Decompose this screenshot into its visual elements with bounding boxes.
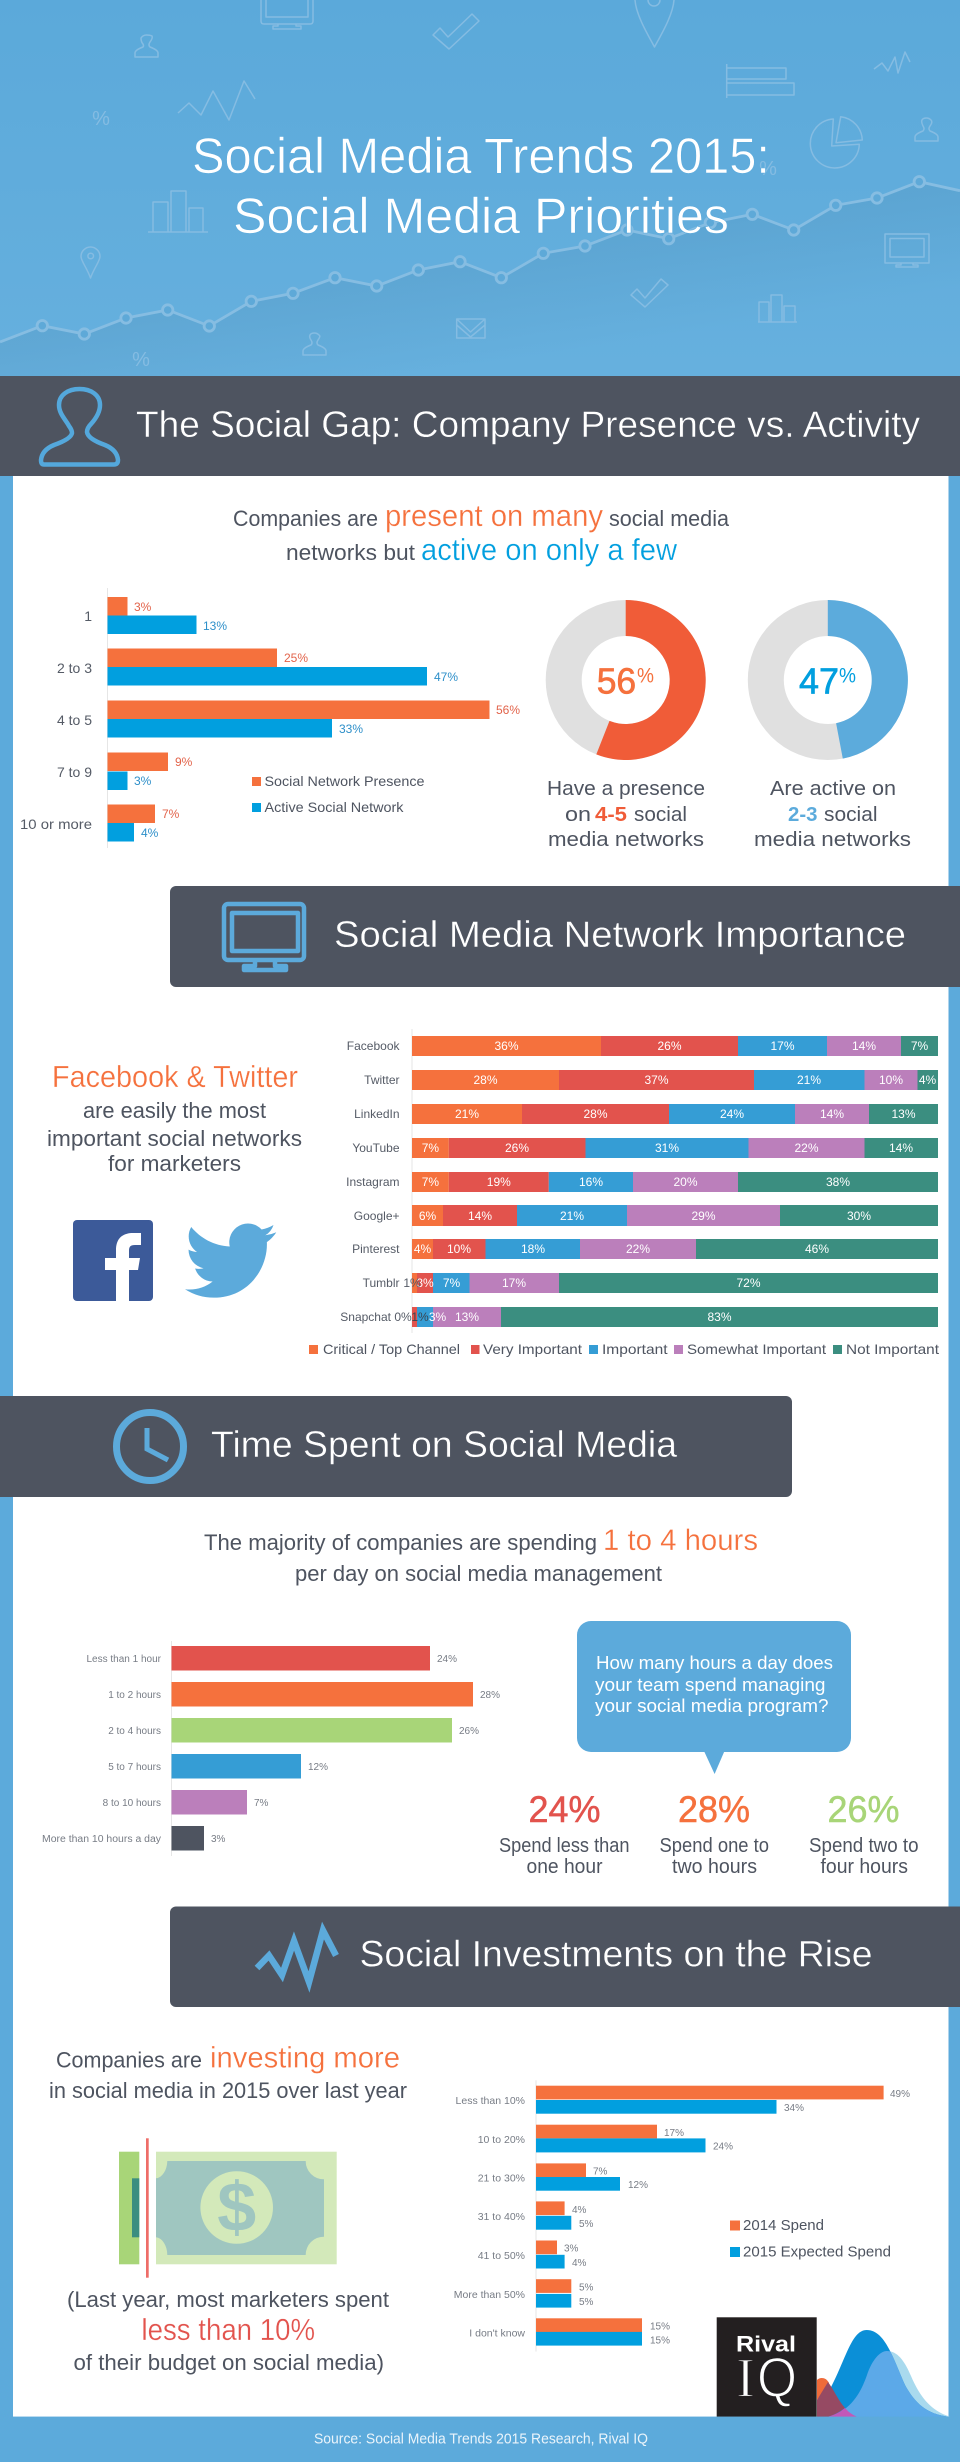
bar chart: network presence vs active: 3% [134,600,152,614]
donut chart: 56% presence: 56 [597,660,636,701]
logo: Rival IQ: I [736,2348,755,2410]
intro statement: investing more: in social media in 2015 over last year [49,2078,407,2103]
segment values: 18% [521,1242,545,1256]
segment values: 21% [455,1107,479,1121]
bar chart: network presence vs active [20,588,520,848]
text block: last year spend [67,2287,389,2375]
icon: dollar bill split at 10 percent [119,2138,337,2278]
stacked bar chart: network importance: Facebook [347,1039,400,1053]
segment values: 7% [911,1039,929,1053]
segment values: 6% [419,1209,437,1223]
bar chart: 2014 vs 2015 spend [454,2080,910,2352]
bar chart: hours spent: 2 to 4 hours [108,1726,161,1737]
segment values: 24% [720,1107,744,1121]
segment values: 14% [889,1141,913,1155]
callout: survey question [577,1621,851,1774]
callout: survey question: your social media program? [595,1695,828,1716]
stat: 24 percent: 24% [528,1789,600,1830]
segment values: 17% [770,1039,795,1053]
donut chart: 56% presence: % [637,665,654,688]
bar chart: 2014 vs 2015 spend: 31 to 40% [478,2211,525,2223]
bar chart: 2014 vs 2015 spend: 17% [664,2128,684,2139]
segment values: 22% [794,1141,819,1155]
section header: Social Investments [170,1906,960,2007]
bar chart: hours spent: More than 10 hours a day [42,1834,161,1845]
bar chart: hours spent: 5 to 7 hours [108,1762,161,1773]
stacked bar chart: network importance: Twitter [364,1073,400,1087]
segment values: 72% [736,1276,761,1290]
bar chart: 2014 vs 2015 spend: 24% [713,2142,733,2152]
stat: 28 percent [660,1789,769,1878]
bar chart: network presence vs active: 7% [162,807,180,821]
legend: Social Network Presence [264,773,425,789]
text block: last year spend: (Last year, most marketers spent [67,2287,389,2312]
donut chart: 47% active: 47 [799,660,839,701]
text block: Facebook and Twitter [47,1059,302,1176]
bar chart: 2014 vs 2015 spend: 15% [650,2336,670,2346]
background line chart [0,176,960,376]
segment values: 31% [655,1141,679,1155]
legend: Somewhat Important [687,1341,826,1357]
text block: Facebook and Twitter: for marketers [108,1151,241,1176]
section header: Network Importance [170,886,960,987]
icon: clock [116,1412,184,1480]
header banner [0,0,960,376]
bar chart: network presence vs active: 3% [134,774,152,788]
bar chart: network presence vs active: 1 [84,608,92,624]
stat: 28 percent: two hours [672,1856,757,1878]
bar chart: hours spent: 8 to 10 hours [103,1798,161,1809]
stat: 26 percent [809,1789,918,1878]
bar chart: hours spent [42,1641,500,1856]
donut caption: active: Are active on [770,778,896,800]
segment values: 83% [707,1310,732,1324]
legend: Important [602,1341,668,1357]
segment values: 3% [429,1310,447,1324]
intro statement: presence vs activity: social media [609,506,730,531]
bar chart: 2014 vs 2015 spend: 21 to 30% [478,2172,525,2184]
segment values: 7% [422,1141,439,1155]
segment values: 28% [473,1073,498,1087]
bar chart: 2014 vs 2015 spend: 4% [572,2258,587,2269]
bar chart: 2014 vs 2015 spend: 5% [579,2297,594,2308]
bar chart: network presence vs active: 13% [203,619,227,633]
intro statement: presence vs activity [233,498,730,567]
segment values: 20% [673,1175,698,1189]
stacked bar chart: network importance: Pinterest [352,1242,400,1256]
text block: last year spend: of their budget on social media) [74,2350,384,2375]
segment values: 1% [403,1276,421,1290]
stat: 26 percent: 26% [828,1789,900,1830]
legend: 2015 Expected Spend [743,2244,891,2260]
text block: Facebook and Twitter: important social networks [47,1126,302,1151]
background percent signs: % [759,158,777,180]
donut caption: presence: Have a presence [547,778,705,800]
legend: Active Social Network [264,799,405,815]
section header: Time Spent [0,1396,792,1497]
segment values: 26% [505,1141,529,1155]
legend [252,773,425,815]
segment values: 4% [414,1242,432,1256]
legend: Critical / Top Channel [323,1341,460,1357]
bar chart: hours spent: 12% [308,1762,328,1773]
intro statement: presence vs activity: active on only a few [421,532,678,567]
stacked bar chart: network importance: YouTube [352,1141,400,1155]
bar chart: 2014 vs 2015 spend: Less than 10% [456,2095,525,2107]
segment values: 29% [691,1209,716,1223]
segment values: 21% [560,1209,584,1223]
title: Social Media Priorities [233,188,729,244]
intro statement: hours per day: per day on social media management [295,1561,662,1586]
segment values: 19% [487,1175,511,1189]
legend: 2014 Spend [743,2217,824,2234]
title [192,128,770,244]
bar chart: hours spent: 3% [211,1834,226,1845]
bar chart: 2014 vs 2015 spend: 15% [650,2322,670,2332]
heading: Social Investments on the Rise [360,1934,872,1975]
bar chart: hours spent: 26% [459,1726,479,1737]
section header: The Social Gap [0,376,960,476]
bar chart: network presence vs active: 10 or more [20,816,92,832]
donut caption: active [754,778,911,851]
donut caption: active: 2-3 [788,804,818,826]
bar chart: hours spent: 1 to 2 hours [108,1690,161,1701]
segment values: 28% [583,1107,608,1121]
bar chart: 2014 vs 2015 spend: 34% [784,2103,804,2114]
segment values: 36% [494,1039,519,1053]
background percent signs: % [92,108,110,130]
stat: 28 percent: 28% [678,1789,750,1830]
segment values: 17% [502,1276,526,1290]
stacked bar chart: network importance: Google+ [354,1209,400,1223]
bar chart: hours spent: 7% [254,1798,269,1809]
donut chart: 47% active [766,600,908,759]
icon: zigzag trend line [257,1930,336,1982]
bar chart: hours spent: Less than 1 hour [86,1654,162,1665]
icon: Facebook [73,1220,153,1301]
segments: somewhat important [433,1036,918,1327]
stat: 24 percent: Spend less than [499,1835,630,1857]
segment values: 14% [468,1209,492,1223]
bar chart: hours spent: 24% [437,1654,457,1665]
background percent signs [92,108,777,371]
bar chart: 2014 vs 2015 spend: 10 to 20% [478,2134,525,2146]
stat: 26 percent: Spend two to [809,1835,918,1857]
bar chart: network presence vs active: 7 to 9 [57,764,92,780]
logo: Rival IQ: Q [757,2346,797,2409]
intro statement: presence vs activity: networks but [286,540,415,565]
segment values [394,1039,937,1324]
footer: source: Source: Social Media Trends 2015 Research, Rival IQ [314,2431,648,2448]
segment values: 3% [416,1276,434,1290]
segment values: 22% [626,1242,650,1256]
text block: Facebook and Twitter: are easily the most [83,1098,266,1123]
segments: critical / top channel [412,1036,601,1293]
bar chart: 2014 vs 2015 spend: 49% [890,2089,910,2100]
segments: important [417,1036,864,1327]
bar chart: 2014 vs 2015 spend: I don't know [469,2328,525,2340]
heading: Social Media Network Importance [334,914,906,955]
legend [309,1341,939,1357]
text block: last year spend: less than 10% [142,2312,315,2347]
bar chart: network presence vs active: 33% [339,722,363,736]
segments: not important [501,1036,938,1327]
bar chart: network presence vs active: 25% [284,651,308,665]
intro statement: investing more: investing more [210,2042,400,2075]
legend: Very Important [483,1341,582,1357]
heading: The Social Gap: Company Presence vs. Activity [136,404,920,445]
segment values: 10% [447,1242,471,1256]
icon: Twitter [185,1224,276,1298]
segment values: 21% [797,1073,821,1087]
intro statement: hours per day: 1 to 4 hours [603,1524,758,1557]
segment values: 37% [644,1073,669,1087]
icon: dollar bill split at 10 percent: $ [217,2168,256,2246]
bar chart: 2014 vs 2015 spend: 7% [593,2166,608,2178]
segment values: 38% [826,1175,850,1189]
legend: Not Important [846,1341,939,1357]
title: Social Media Trends 2015: [192,128,770,184]
segment values: 30% [847,1209,871,1223]
segment values: 7% [443,1276,461,1290]
intro statement: investing more: Companies are [56,2048,202,2073]
icon: person [41,389,118,464]
stat: 26 percent: four hours [820,1856,908,1878]
segment values: 14% [820,1107,844,1121]
background icons [81,0,938,355]
bar chart: 2014 vs 2015 spend: More than 50% [454,2289,525,2301]
segment values: 0% [394,1310,412,1324]
intro statement: presence vs activity: present on many [385,498,603,533]
footer: source [0,2417,960,2462]
segment values: 16% [579,1175,603,1189]
stat: 24 percent: one hour [526,1856,603,1878]
donut caption: presence: media networks [548,829,704,851]
icon: monitor [224,904,304,970]
segment values: 4% [919,1073,937,1087]
stat: 24 percent [499,1789,630,1878]
segment values: 7% [422,1175,439,1189]
bar chart: network presence vs active: 4 to 5 [57,712,92,728]
donut caption: active: social [824,804,878,826]
bar chart: network presence vs active: 4% [141,826,159,840]
logo: Rival IQ [717,2317,950,2417]
stacked bar chart: network importance [309,1029,939,1357]
segment values: 13% [455,1310,479,1324]
bar chart: 2014 vs 2015 spend: 3% [564,2244,579,2254]
background percent signs: % [132,349,150,371]
callout: survey question: your team spend managing [595,1674,826,1695]
bar chart: network presence vs active: 47% [434,670,458,684]
intro statement: hours per day: The majority of companies are spending [204,1530,597,1555]
segment values: 26% [657,1039,682,1053]
donut chart: 56% presence [564,600,706,760]
bar chart: 2014 vs 2015 spend: 41 to 50% [478,2250,525,2262]
heading: Time Spent on Social Media [211,1424,677,1465]
logo: Rival IQ: Rival [736,2332,796,2357]
callout: survey question: How many hours a day does [596,1652,833,1673]
segment values: 1% [411,1310,429,1324]
bar chart: 2014 vs 2015 spend: 4% [572,2205,587,2216]
donut caption: active: media networks [754,829,911,851]
intro statement: hours per day [204,1524,758,1586]
text block: Facebook and Twitter: Facebook & Twitter [52,1059,298,1094]
segment values: 10% [879,1073,903,1087]
segment values: 14% [852,1039,876,1053]
bar chart: hours spent: 28% [480,1690,500,1701]
stacked bar chart: network importance: Instagram [346,1175,400,1189]
bar chart: 2014 vs 2015 spend: 5% [579,2282,594,2294]
bar chart: 2014 vs 2015 spend: 12% [628,2180,648,2191]
bar chart: network presence vs active: 9% [175,755,193,769]
donut caption: presence: on [565,804,591,826]
bar chart: network presence vs active: 56% [496,703,520,717]
stacked bar chart: network importance: Tumblr [363,1276,400,1290]
stacked bar chart: network importance: LinkedIn [354,1107,400,1121]
bar chart: 2014 vs 2015 spend: 5% [579,2219,594,2230]
segment values: 13% [891,1107,916,1121]
donut caption: presence: social [634,804,687,826]
legend [730,2217,891,2260]
donut caption: presence [547,778,705,851]
intro statement: presence vs activity: Companies are [233,506,378,531]
intro statement: investing more [49,2042,407,2103]
donut chart: 47% active: % [839,665,856,688]
donut caption: presence: 4-5 [595,804,627,826]
bar chart: network presence vs active: 2 to 3 [57,660,92,676]
segments: very important [412,1036,754,1327]
segment values: 46% [805,1242,829,1256]
stat: 28 percent: Spend one to [660,1835,769,1857]
stacked bar chart: network importance: Snapchat [340,1310,392,1324]
